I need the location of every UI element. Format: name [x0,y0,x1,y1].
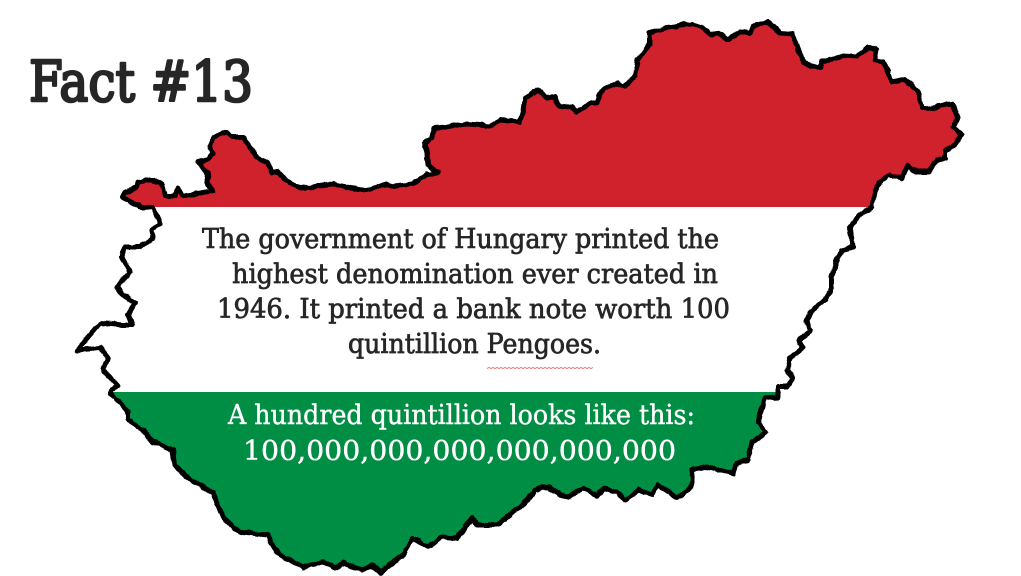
quintillion callout: 100,000,000,000,000,000,000 [243,436,676,467]
fact text block: 1946. It printed a bank note worth 100 [217,294,730,325]
spellcheck squiggle under Pengoes [487,368,593,369]
green band [112,392,776,569]
fact text block: quintillion Pengoes. [348,329,601,360]
quintillion callout: A hundred quintillion looks like this: [227,400,695,431]
red band [125,24,958,207]
quintillion callout [227,400,695,467]
fact text block: highest denomination ever created in [232,259,718,290]
fact text block [202,224,730,360]
fact text block: The government of Hungary printed the [202,224,719,255]
title: Fact #13 [29,50,253,115]
